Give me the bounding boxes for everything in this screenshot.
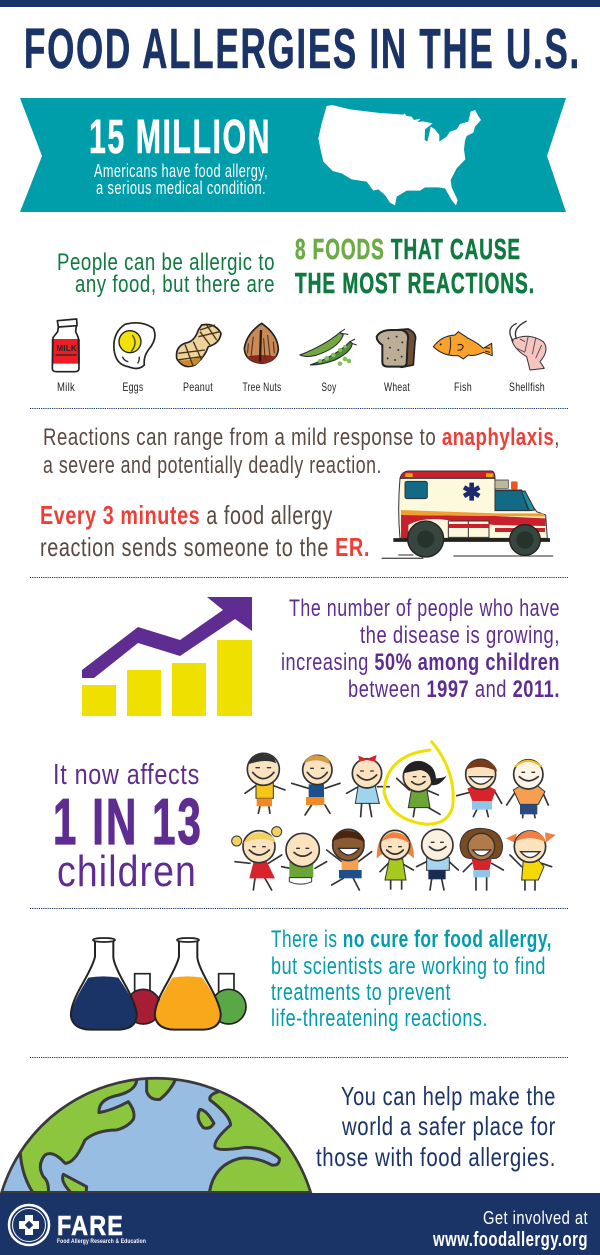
icon: globe [0,1076,312,1193]
banner text: Americans have food allergy, [94,161,268,181]
blue flask [71,938,137,1030]
child 1 [245,753,285,813]
ER statistic [40,500,370,562]
child 7 [232,827,282,890]
food labels: Eggs [122,380,144,394]
highlight ring [384,742,453,824]
food labels: Soy [322,380,336,394]
FARE logo: Food Allergy Research & Education [57,1238,146,1245]
intro text: any food, but there are [75,271,275,298]
ER statistic: Every 3 minutes a food allergy [40,500,333,530]
call to action [316,1081,556,1172]
food labels: Peanut [183,380,213,394]
icon: soy [300,329,357,366]
footer call to action [432,1208,588,1251]
children illustration [232,742,556,890]
ER statistic: reaction sends someone to the ER. [40,532,370,562]
arrow: rising trend [82,597,252,678]
banner: 15 million [20,98,566,212]
food labels: Shellfish [509,380,545,394]
icon: eggs [114,323,155,368]
banner text: a serious medical condition. [96,178,266,198]
FARE logo: FARE [57,1210,124,1241]
icon: shellfish [510,321,546,370]
icon: US map [318,105,481,205]
growth text: between 1997 and 2011. [348,676,560,703]
child 2 [292,755,340,815]
banner headline: 15 MILLION [89,111,271,164]
1 in 13 statistic: 1 IN 13 [53,785,203,858]
child 3 [347,755,389,817]
child 10 [377,830,414,889]
FARE logo [9,1205,146,1245]
food labels [57,380,545,394]
child 9 [327,829,372,890]
1 in 13 statistic: children [57,847,197,896]
food icons, left group [52,319,278,372]
food labels: Fish [454,380,472,394]
reactions text: Reactions can range from a mild response to anaphylaxis, [43,424,560,451]
child 8 [282,833,327,884]
bar chart: growth [82,597,252,716]
research text: treatments to prevent [271,979,451,1006]
food icons, right group [300,321,546,370]
icon: flasks [71,938,246,1030]
1 in 13 statistic [53,759,203,896]
red flask [126,974,161,1024]
icon: ambulance [382,471,553,558]
green flask [211,974,246,1024]
orange flask [155,938,221,1030]
footer [0,1193,600,1255]
growth text [281,595,560,703]
food labels: Wheat [384,380,410,394]
1 in 13 statistic: It now affects [53,759,200,791]
child 13 [506,831,556,890]
child 12 [460,828,503,890]
banner text [94,161,268,198]
icon: wheat [377,329,416,367]
icon: milk: MILK [56,344,77,353]
child 6 [507,760,548,818]
intro text [57,234,535,300]
icon: milk [52,319,80,372]
foods heading: 8 FOODS THAT CAUSE [295,234,521,266]
icon: tree nuts [244,323,278,363]
reactions text [43,424,560,479]
intro text: People can be allergic to [57,249,275,276]
reactions text: a severe and potentially deadly reaction. [43,452,382,479]
icon: peanut [176,324,221,367]
selected child [397,762,447,817]
child 5 [457,759,502,817]
food labels: Tree Nuts [242,380,282,394]
research text: life-threatening reactions. [271,1005,488,1032]
research text [271,926,552,1032]
foods heading [295,234,535,300]
food labels: Milk [57,380,75,394]
icon: fish [433,332,492,359]
child 11 [417,829,458,890]
top bar [0,0,600,7]
